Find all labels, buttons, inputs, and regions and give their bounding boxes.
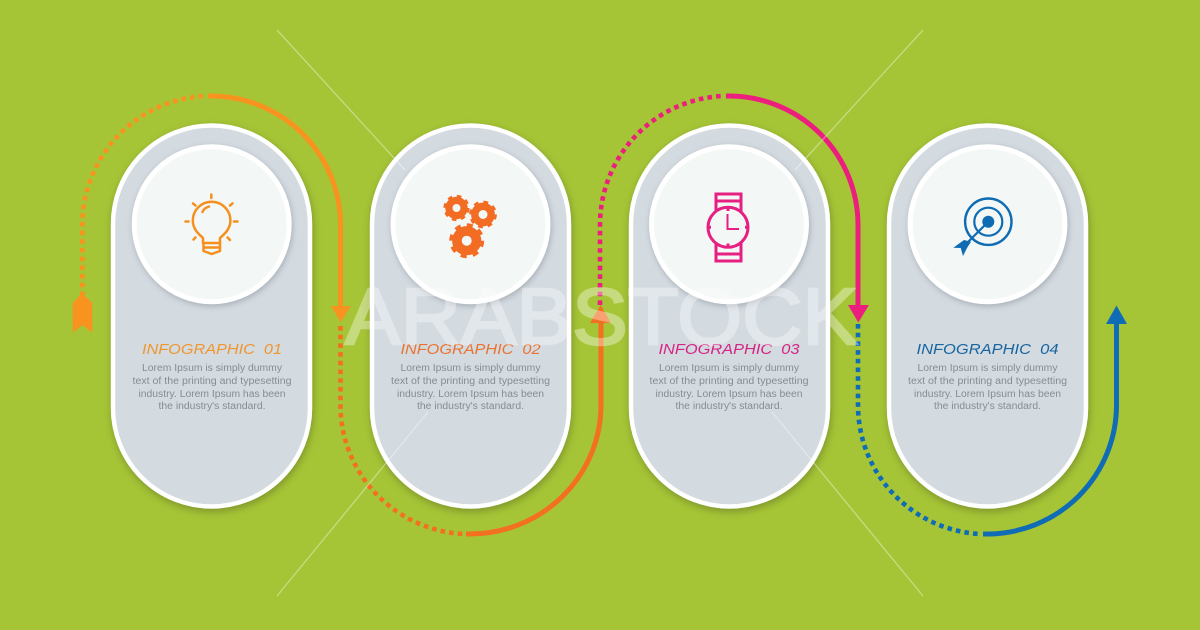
panel: card 03 (631, 126, 828, 506)
icon: wrist watch (708, 194, 748, 261)
card 04 text: text of the printing and typesetting (908, 376, 1067, 387)
card 01 icon disc (134, 147, 289, 302)
card 03 text: industry. Lorem Ipsum has been (656, 389, 802, 400)
card 02 body (372, 126, 569, 506)
card 03 text (650, 363, 808, 412)
panel: card 01 (113, 126, 310, 506)
card 02 text: the industry's standard. (417, 401, 524, 412)
card 01 text: industry. Lorem Ipsum has been (138, 389, 286, 400)
panel: card 04 (889, 126, 1086, 506)
arrow: dark orange path under card 02 (340, 305, 611, 534)
icon: gears (445, 196, 495, 256)
card 02 heading: INFOGRAPHIC 02 (400, 341, 541, 358)
card 04 icon disc (910, 147, 1065, 302)
card 03 heading: INFOGRAPHIC 03 (658, 341, 800, 358)
card 01 body (113, 126, 310, 506)
card 01 text (132, 363, 292, 412)
card 02 text (391, 363, 550, 412)
card 01 text: Lorem Ipsum is simply dummy (142, 363, 282, 374)
icon: target with arrow (953, 198, 1012, 256)
card 04 text: industry. Lorem Ipsum has been (914, 389, 1061, 400)
arrow: blue path under card 04 (858, 306, 1127, 534)
card 03 text: text of the printing and typesetting (650, 376, 808, 387)
arrow: pink path over card 03 (600, 96, 869, 322)
card 02 text: text of the printing and typesetting (391, 376, 550, 387)
panel: card 02 (372, 126, 569, 506)
card 01 text: the industry's standard. (158, 401, 266, 412)
card 02 text: industry. Lorem Ipsum has been (397, 389, 544, 400)
watermark: ARABSTOCK: ARABSTOCK (345, 272, 858, 361)
card 04 text: Lorem Ipsum is simply dummy (918, 363, 1058, 374)
card 03 body (631, 126, 828, 506)
card 03 text: the industry's standard. (676, 401, 782, 412)
card 01 heading: INFOGRAPHIC 01 (142, 341, 282, 358)
card 01 text: text of the printing and typesetting (132, 376, 292, 387)
card 04 heading: INFOGRAPHIC 04 (916, 341, 1058, 358)
card 03 text: Lorem Ipsum is simply dummy (659, 363, 799, 374)
card 04 text (908, 363, 1067, 412)
icon: light bulb (186, 194, 238, 254)
card 02 icon disc (393, 147, 548, 302)
arrow: orange path from ribbon tail over card 01 (73, 96, 351, 333)
card 02 text: Lorem Ipsum is simply dummy (400, 363, 540, 374)
card 04 text: the industry's standard. (934, 401, 1041, 412)
card 04 body (889, 126, 1086, 506)
card 03 icon disc (652, 147, 806, 302)
watermark: diagonal lines (277, 30, 923, 596)
